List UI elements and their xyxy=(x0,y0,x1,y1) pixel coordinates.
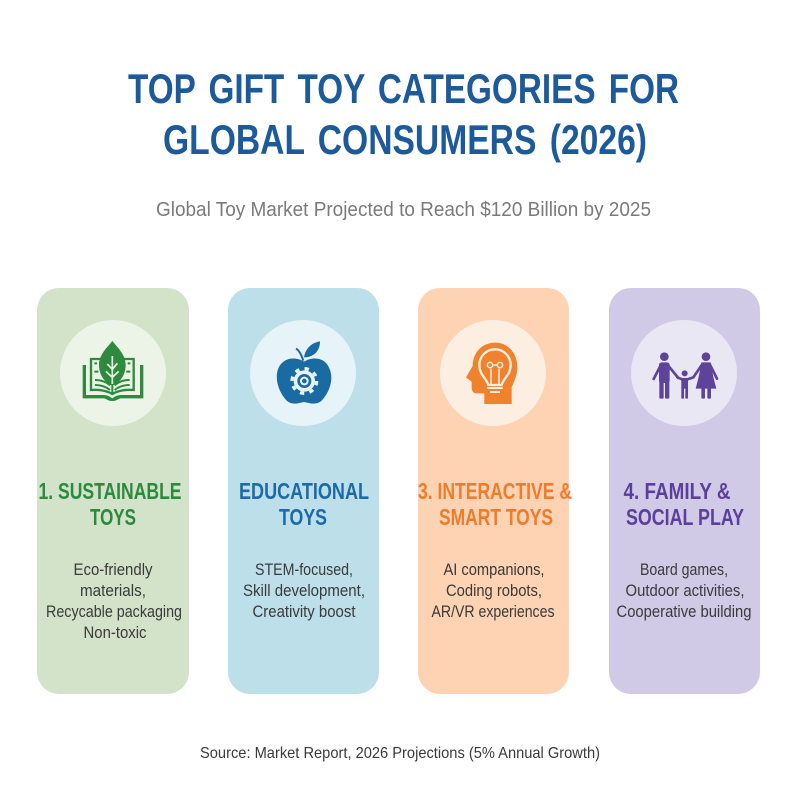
panel: family and social play xyxy=(609,288,760,694)
source note: Source: Market Report, 2026 Projections (5% Annual Growth) xyxy=(200,745,600,762)
heading: 1. SUSTAINABLE xyxy=(38,478,182,504)
card background xyxy=(228,288,379,694)
icon circle xyxy=(250,320,356,426)
heading: TOYS xyxy=(279,504,327,530)
icon: family xyxy=(654,352,717,399)
description: materials, xyxy=(80,582,146,600)
description: AR/VR experiences xyxy=(432,603,554,621)
description xyxy=(616,561,752,621)
heading: SOCIAL PLAY xyxy=(626,504,744,530)
heading: 3. INTERACTIVE & xyxy=(418,478,572,504)
heading xyxy=(418,478,572,530)
panel: sustainable toys xyxy=(37,288,189,694)
title: GLOBAL CONSUMERS (2026) xyxy=(163,116,647,163)
icon: apple with gear xyxy=(277,341,331,404)
description xyxy=(243,561,365,621)
card background xyxy=(609,288,760,694)
description: STEM-focused, xyxy=(255,561,353,579)
description: AI companions, xyxy=(444,561,544,579)
heading xyxy=(624,478,744,530)
heading: 4. FAMILY & xyxy=(624,478,730,504)
icon circle xyxy=(440,320,546,426)
description: Non-toxic xyxy=(84,624,146,642)
icon circle xyxy=(60,320,166,426)
panel: interactive and smart toys xyxy=(418,288,572,694)
heading: TOYS xyxy=(90,504,136,530)
subtitle: Global Toy Market Projected to Reach $120 Billion by 2025 xyxy=(156,199,651,221)
description: Outdoor activities, xyxy=(626,582,744,600)
description: Cooperative building xyxy=(616,603,752,621)
description: Eco-friendly xyxy=(74,561,153,579)
description: Skill development, xyxy=(243,582,365,600)
description: Board games, xyxy=(640,561,728,579)
description: Coding robots, xyxy=(446,582,542,600)
description: Recycable packaging xyxy=(46,603,182,621)
description xyxy=(46,561,182,642)
icon: book with leaf xyxy=(83,341,143,401)
icon circle xyxy=(631,320,737,426)
description: Creativity boost xyxy=(252,603,356,621)
card background xyxy=(418,288,569,694)
panel: educational toys xyxy=(228,288,379,694)
icon: head with light bulb xyxy=(466,343,517,404)
heading xyxy=(38,478,182,530)
heading xyxy=(239,478,369,530)
title xyxy=(128,65,679,163)
description xyxy=(432,561,554,621)
card background xyxy=(37,288,189,694)
heading: SMART TOYS xyxy=(439,504,553,530)
heading: EDUCATIONAL xyxy=(239,478,369,504)
